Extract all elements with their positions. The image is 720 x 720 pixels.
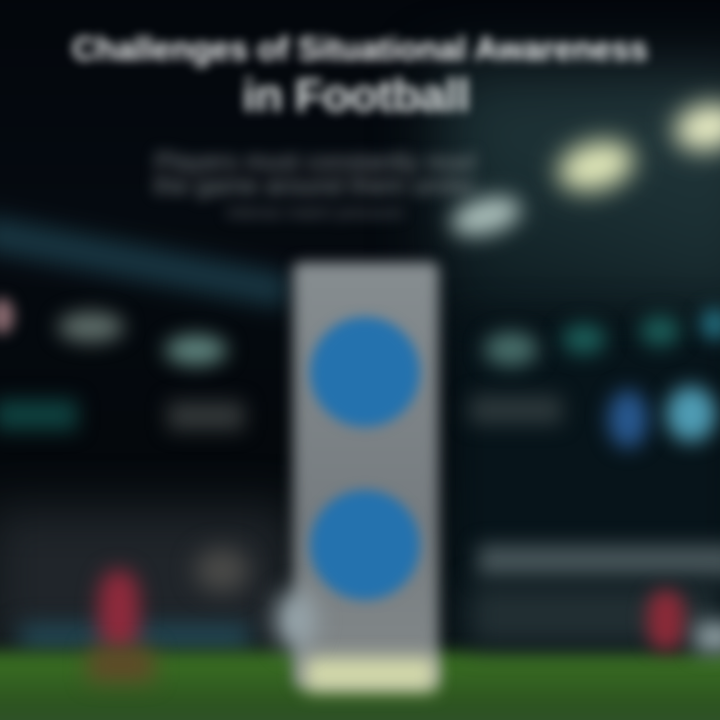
right lower stand <box>470 585 720 645</box>
player left shorts <box>88 648 154 682</box>
crowd strip blue <box>20 625 250 649</box>
grass pitch <box>0 652 720 720</box>
stand right <box>450 320 720 650</box>
floodlight right <box>670 97 720 157</box>
left icon one <box>0 298 14 334</box>
left icon three <box>165 335 227 365</box>
player right red <box>647 590 685 650</box>
right corner white figure <box>695 622 720 652</box>
blue circle bottom <box>310 490 420 600</box>
player left red <box>98 570 140 652</box>
central panel <box>293 262 439 687</box>
title <box>66 29 654 121</box>
right icon one <box>484 332 538 366</box>
left teal label <box>0 400 77 430</box>
white figure near panel <box>275 590 315 650</box>
title: in Football <box>242 69 470 121</box>
blue blob left <box>608 390 648 448</box>
right grey band <box>478 545 720 577</box>
right icon two <box>562 324 606 354</box>
crowd figure <box>195 548 249 592</box>
subtitle text: intense match pressure <box>227 203 403 222</box>
floodlight large <box>552 133 640 199</box>
stadium roof right <box>440 70 720 330</box>
right icon four <box>700 308 720 340</box>
left grey label <box>168 402 244 430</box>
blue circle top <box>310 317 420 427</box>
right blue blobs <box>595 372 720 460</box>
blue blob right <box>666 386 716 442</box>
right icon row <box>474 299 720 378</box>
floodlight small <box>447 189 525 243</box>
title: Challenges of Situational Awareness <box>72 30 648 67</box>
left icon row <box>0 290 238 378</box>
roof beam left <box>0 216 290 308</box>
crowd left <box>0 510 290 650</box>
left icon two <box>58 312 124 342</box>
right grey label <box>470 396 562 424</box>
panel bottom label <box>305 657 435 691</box>
subtitle text <box>148 146 480 223</box>
subtitle text: Players must constantly read <box>154 148 475 176</box>
right icon three <box>640 316 680 346</box>
subtitle text: the game around them under <box>154 172 476 200</box>
